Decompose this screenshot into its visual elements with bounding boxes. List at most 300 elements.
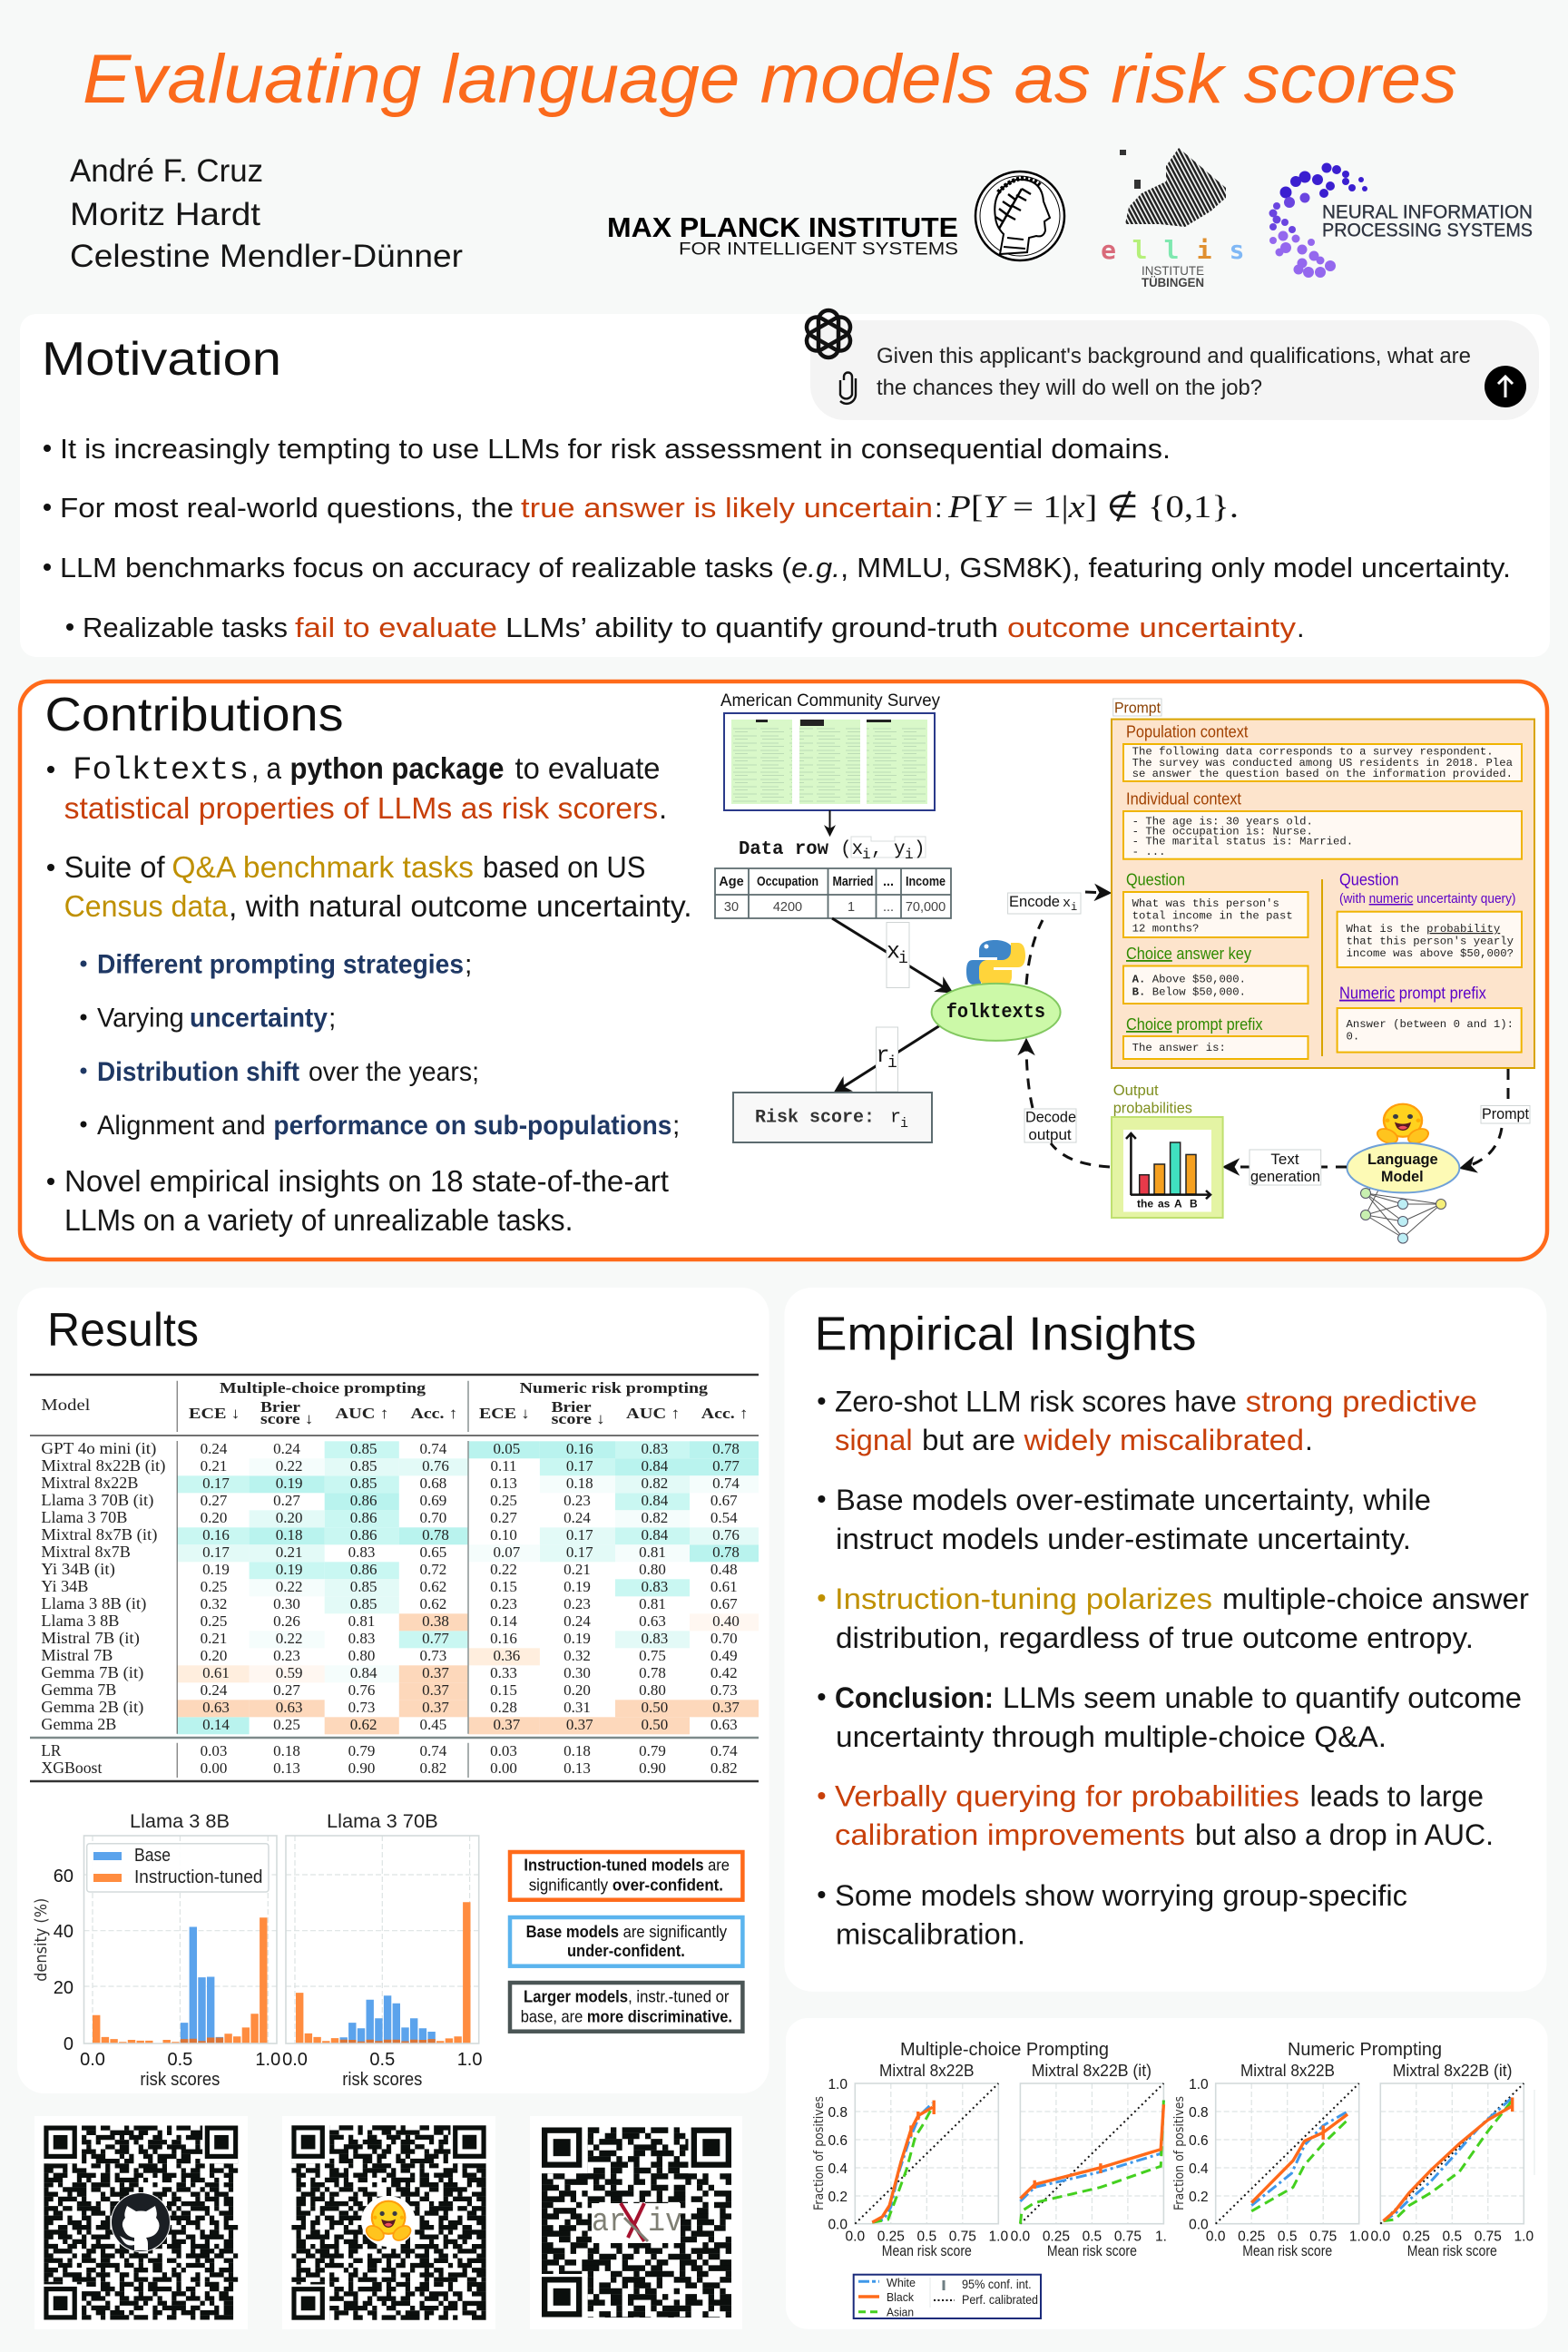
heading: empirical insights: Empirical Insights xyxy=(815,1308,1196,1361)
icon: python logo xyxy=(966,940,1025,987)
table rows: 0.81 xyxy=(639,1544,666,1561)
table rows: 0.19 xyxy=(564,1578,591,1595)
table header: AUC ↑ xyxy=(626,1405,681,1422)
chart: multiple-choice Mixtral 8x22B: 1.0 xyxy=(828,2077,848,2092)
risk score box xyxy=(733,1093,932,1142)
chart: numeric Mixtral 8x22B: 0.8 xyxy=(1189,2105,1209,2121)
data table xyxy=(715,868,951,918)
logo: ELLIS Institute Tübingen: l xyxy=(1164,235,1179,265)
table rows: Mixtral 8x22B (it) xyxy=(41,1456,166,1475)
table rows: 0.80 xyxy=(348,1647,375,1664)
chart: Llama 3 8B histogram: Llama 3 8B xyxy=(130,1811,230,1832)
table header: Acc. ↑ xyxy=(410,1405,457,1422)
chart: numeric Mixtral 8x22B: 0.0 xyxy=(1189,2218,1209,2232)
bullet: realizable tasks: Realizable tasks xyxy=(83,612,288,643)
table rows: 0.19 xyxy=(276,1475,302,1492)
prompt: individual context: - The age is: 30 years old. xyxy=(1132,815,1313,828)
insight: predictive signal: . xyxy=(1305,1424,1313,1456)
label: r_i xyxy=(877,1027,898,1092)
table rows: 0.11 xyxy=(490,1457,517,1475)
callout: more discriminative: base, are more discriminative. xyxy=(521,2008,732,2026)
data row label: i xyxy=(905,847,914,863)
table rows: 0.85 xyxy=(350,1440,377,1457)
table rows: 0.84 xyxy=(350,1664,377,1681)
prompt: question: 12 months? xyxy=(1132,923,1199,936)
table rows: 0.81 xyxy=(348,1612,375,1630)
table rows: 0.42 xyxy=(710,1664,738,1681)
table rows: XGBoost xyxy=(41,1759,103,1777)
chart: Llama 3 70B histogram: 0.0 xyxy=(282,2050,308,2070)
table rows: 0.90 xyxy=(639,1759,666,1777)
icon: arXiv logo: iv xyxy=(648,2203,682,2240)
bullet: Q&A benchmark: Q&A benchmark tasks xyxy=(172,850,474,884)
data row label: ) xyxy=(914,839,926,860)
label: decode output: Decode xyxy=(1025,1109,1076,1126)
label: text generation: Text xyxy=(1270,1151,1299,1168)
table rows: 0.62 xyxy=(350,1716,377,1733)
table rows: 0.59 xyxy=(276,1664,302,1681)
table rows: 0.26 xyxy=(273,1612,300,1630)
insight: conclusion xyxy=(818,1681,1522,1753)
chart: numeric Mixtral 8x22B (it): 0.0 xyxy=(1371,2229,1390,2244)
table rows: 0.00 xyxy=(201,1759,227,1777)
title: Evaluating language models as risk scores xyxy=(83,41,1457,118)
heading: contributions: Contributions xyxy=(45,689,343,741)
data table: 1 xyxy=(848,900,855,915)
chart: multiple-choice Mixtral 8x22B (it): 0.5 xyxy=(1083,2229,1102,2244)
data table: 4200 xyxy=(773,900,802,915)
table rows: 0.37 xyxy=(422,1681,449,1699)
table rows: Mixtral 8x22B xyxy=(41,1474,138,1492)
data table: 30 xyxy=(724,900,739,915)
prompt: question: Question xyxy=(1126,871,1185,889)
table rows: 0.67 xyxy=(710,1492,738,1509)
table rows: 0.54 xyxy=(710,1509,738,1526)
table rows: Llama 3 70B xyxy=(41,1508,127,1526)
table rows: 0.24 xyxy=(564,1612,591,1630)
chat prompt box xyxy=(810,320,1539,420)
table rows: 0.19 xyxy=(202,1561,230,1578)
data table: Age xyxy=(719,875,744,889)
table rows: 0.84 xyxy=(642,1526,669,1544)
chart: multiple-choice Mixtral 8x22B: 0.75 xyxy=(949,2229,976,2244)
chart: output probabilities: B xyxy=(1190,1198,1198,1210)
insight: group miscalibration: Some models show worrying group-specific xyxy=(835,1879,1407,1912)
table rows: 0.82 xyxy=(642,1509,668,1526)
chart: multiple-choice Mixtral 8x22B: 1.0 xyxy=(989,2229,1008,2244)
table rows: 0.63 xyxy=(202,1699,230,1716)
chart: multiple-choice Mixtral 8x22B: 0.0 xyxy=(828,2218,848,2232)
icon: hugging face xyxy=(1375,1104,1431,1146)
table rows: 0.86 xyxy=(350,1492,377,1509)
chart: numeric Mixtral 8x22B: Mixtral 8x22B xyxy=(1240,2062,1335,2080)
data row label: y xyxy=(894,839,906,860)
chart: numeric Mixtral 8x22B (it): Mixtral 8x22B (it) xyxy=(1393,2062,1512,2080)
prompt: choice answer key xyxy=(1123,945,1308,1004)
callout: over-confident xyxy=(510,1852,742,1900)
table rows: Yi 34B (it) xyxy=(41,1560,115,1578)
survey form thumbnail xyxy=(724,713,935,810)
heading: results: Results xyxy=(47,1304,199,1357)
arrow: encode head xyxy=(1085,892,1109,893)
table rows: 0.19 xyxy=(276,1561,302,1578)
bullet: true answer: For most real-world questions, the xyxy=(60,492,514,524)
table rows: 0.03 xyxy=(490,1742,517,1759)
callout: more discriminative: Larger models, instr.-tuned or xyxy=(524,1988,730,2006)
table rows: 0.86 xyxy=(350,1509,377,1526)
heading: numeric prompting: Numeric Prompting xyxy=(1288,2040,1442,2060)
chart: multiple-choice Mixtral 8x22B: 0.8 xyxy=(828,2105,848,2121)
table rows: 0.38 xyxy=(422,1612,449,1630)
table header: Model xyxy=(41,1396,91,1414)
chart: numeric Mixtral 8x22B: 1.0 xyxy=(1189,2077,1209,2092)
table rows: 0.17 xyxy=(566,1544,593,1561)
table rows: 0.81 xyxy=(639,1595,666,1612)
table rows: 0.22 xyxy=(276,1630,302,1647)
insight: verbal probabilities: calibration improvements xyxy=(835,1818,1185,1851)
table header: ECE ↓ xyxy=(479,1405,530,1422)
sub-bullet: prompting strategies: Different prompting strategies xyxy=(97,949,464,979)
bullet: empirical insights: LLMs on a variety of unrealizable tasks. xyxy=(64,1203,573,1237)
label: text generation: generation xyxy=(1250,1168,1320,1185)
table rows: 0.20 xyxy=(276,1509,302,1526)
label: prompt: Prompt xyxy=(1114,699,1161,717)
insight: instruction-tuning polarizes: Instruction-tuning polarizes xyxy=(835,1583,1212,1615)
chart: Llama 3 8B histogram xyxy=(32,1811,280,2090)
logo: ELLIS Institute Tübingen: INSTITUTE xyxy=(1142,263,1204,278)
sub-bullet: distribution shift: Distribution shift xyxy=(97,1057,299,1087)
chart: Llama 3 70B histogram: risk scores xyxy=(342,2070,422,2090)
sub-bullet: prompting strategies: ; xyxy=(465,949,472,979)
table rows: 0.72 xyxy=(420,1561,446,1578)
icon: ChatGPT logo xyxy=(803,310,854,358)
icon: GitHub logo xyxy=(111,2192,171,2252)
callout: under-confident xyxy=(510,1917,742,1966)
table rows: 0.25 xyxy=(201,1612,227,1630)
table rows: 0.16 xyxy=(202,1526,230,1544)
table rows: Mixtral 8x7B (it) xyxy=(41,1525,158,1544)
heading: multiple-choice prompting: Multiple-choice Prompting xyxy=(900,2040,1109,2060)
table header: ECE ↓ xyxy=(189,1405,240,1422)
icon: arXiv logo: ar xyxy=(592,2203,626,2240)
table rows: 0.24 xyxy=(201,1440,228,1457)
prompt: individual context xyxy=(1123,789,1522,859)
table rows: 0.70 xyxy=(420,1509,446,1526)
arrow: text generation xyxy=(1225,1165,1347,1169)
label: output probabilities xyxy=(1113,1082,1192,1116)
bullet: realizable tasks: LLMs’ ability to quantify ground-truth xyxy=(505,612,998,643)
arrow: prompt to language model xyxy=(1462,1128,1502,1168)
chart: output probabilities xyxy=(1112,1117,1223,1218)
table rows: 0.30 xyxy=(564,1664,591,1681)
chart legend: groups: 95% conf. int. xyxy=(962,2277,1032,2291)
table rows: 0.73 xyxy=(420,1647,446,1664)
data row label: (x xyxy=(840,839,863,860)
prompt: question xyxy=(1123,871,1308,937)
table rows: 0.32 xyxy=(201,1595,227,1612)
bullet: folktexts: statistical properties of LLMs as risk scorers xyxy=(64,791,658,825)
callout: under-confident: Base models are significantly xyxy=(526,1923,727,1941)
table rows: 0.84 xyxy=(642,1492,669,1509)
icon: arXiv logo xyxy=(592,2203,682,2243)
prompt: numeric prefix: Answer (between 0 and 1): xyxy=(1347,1018,1514,1031)
chart: numeric Mixtral 8x22B: 0.5 xyxy=(1278,2229,1297,2244)
table rows: 0.22 xyxy=(490,1561,517,1578)
bullet: benchmarks: LLM benchmarks focus on accuracy of realizable tasks ( e.g., MMLU, GSM8K), featuring only model uncertainty. xyxy=(60,552,1511,583)
table rows: 0.79 xyxy=(348,1742,375,1759)
prompt: individual context: Individual context xyxy=(1126,789,1241,808)
node: folktexts: folktexts xyxy=(946,1001,1045,1024)
panel: contributions xyxy=(20,681,1547,1259)
logo: ELLIS Institute Tübingen: e xyxy=(1101,235,1116,265)
heading: motivation: Motivation xyxy=(42,333,281,386)
arrow: folktexts to risk score xyxy=(836,1025,940,1092)
chart: numeric Mixtral 8x22B: 0.75 xyxy=(1309,2229,1337,2244)
logo: NeurIPS xyxy=(1269,163,1533,278)
bullet: realizable tasks: . xyxy=(1297,612,1305,643)
table rows: 0.21 xyxy=(276,1544,302,1561)
table rows: 0.78 xyxy=(712,1440,740,1457)
table rows: 0.77 xyxy=(712,1457,740,1475)
insight: conclusion: Conclusion: xyxy=(835,1681,994,1714)
chart: multiple-choice Mixtral 8x22B (it) xyxy=(1011,2062,1167,2259)
table rows: 0.22 xyxy=(276,1578,302,1595)
QR code: Hugging Face xyxy=(282,2116,495,2329)
label: x_i: i xyxy=(898,950,908,968)
table rows: 0.79 xyxy=(639,1742,666,1759)
table rows: 0.13 xyxy=(273,1759,300,1777)
table rows: 0.37 xyxy=(422,1664,449,1681)
chart: output probabilities: the xyxy=(1137,1198,1153,1210)
authors: André F. Cruz xyxy=(70,153,263,189)
bullet: true answer: P[Y = 1| x] ∉ {0,1}. xyxy=(947,489,1239,524)
table rows: 0.00 xyxy=(490,1759,517,1777)
chart: Llama 3 70B histogram: 0.5 xyxy=(369,2050,395,2070)
risk score box: Risk score: xyxy=(755,1108,875,1129)
table header: Brier xyxy=(260,1398,301,1416)
table rows: 0.82 xyxy=(710,1759,738,1777)
table rows: Mistral 7B xyxy=(41,1646,113,1664)
prompt: individual context: - The marital status is: Married. xyxy=(1132,836,1353,848)
table rows: 0.22 xyxy=(276,1457,302,1475)
data row label: , xyxy=(871,839,883,860)
chart: Llama 3 8B histogram: density (%) xyxy=(32,1898,51,1982)
insight: instruction-tuning polarizes: distribution, regardless of true outcome entropy. xyxy=(836,1622,1474,1654)
table rows: 0.83 xyxy=(348,1630,375,1647)
authors: Celestine Mendler-Dünner xyxy=(70,239,463,274)
table rows: 0.27 xyxy=(201,1492,228,1509)
logo: NeurIPS: PROCESSING SYSTEMS xyxy=(1322,220,1533,241)
logo: ELLIS Institute Tübingen xyxy=(1101,145,1244,289)
table rows: 0.73 xyxy=(348,1699,375,1716)
chart: numeric Mixtral 8x22B: Mean risk score xyxy=(1242,2242,1332,2259)
table header: score ↓ xyxy=(552,1410,605,1427)
prompt: numeric question: What is the probability xyxy=(1347,923,1500,936)
bullet: folktexts: to evaluate xyxy=(515,751,661,785)
chart: numeric Mixtral 8x22B: Fraction of positives xyxy=(1172,2096,1187,2210)
prompt: numeric question xyxy=(1338,871,1522,967)
chart: Llama 3 8B histogram: 0.5 xyxy=(167,2050,192,2070)
prompt: individual context: - The occupation is: Nurse. xyxy=(1132,826,1313,838)
sub-bullet: sub-populations: Alignment and xyxy=(97,1111,266,1141)
table rows: Llama 3 8B xyxy=(41,1612,119,1630)
prompt: numeric prefix: Numeric prompt prefix xyxy=(1339,985,1486,1003)
authors xyxy=(70,153,463,274)
table rows xyxy=(41,1439,740,1777)
table rows: 0.50 xyxy=(642,1716,668,1733)
insight: predictive signal: widely miscalibrated xyxy=(1023,1424,1304,1456)
bullet: true answer: true answer is likely uncertain xyxy=(521,492,933,524)
table rows: Mistral 7B (it) xyxy=(41,1629,140,1647)
prompt: choice answer key: A. Above $50,000. xyxy=(1132,974,1246,986)
insight: conclusion: LLMs seem unable to quantify outcome xyxy=(1003,1681,1522,1714)
table rows: 0.15 xyxy=(490,1681,517,1699)
table rows: 0.84 xyxy=(642,1457,669,1475)
prompt: question: What was this person's xyxy=(1132,897,1279,910)
heading: American Community Survey: American Community Survey xyxy=(720,691,940,710)
table rows: 0.18 xyxy=(273,1742,300,1759)
heatmap cells xyxy=(177,1441,759,1734)
label: decode output: output xyxy=(1028,1126,1072,1143)
data table: ... xyxy=(883,875,894,889)
insight: predictive signal xyxy=(818,1385,1477,1456)
table rows: 0.17 xyxy=(202,1544,230,1561)
label: text generation xyxy=(1250,1150,1321,1185)
sub-bullet: uncertainty: uncertainty xyxy=(190,1004,328,1034)
chart: Llama 3 8B histogram: 40 xyxy=(54,1922,74,1942)
table header: Acc. ↑ xyxy=(701,1405,749,1422)
bullet: true answer xyxy=(44,489,1239,524)
table rows: 0.17 xyxy=(202,1475,230,1492)
table rows: 0.17 xyxy=(566,1526,593,1544)
panel: prompt xyxy=(1112,699,1534,1068)
table rows: 0.80 xyxy=(639,1561,666,1578)
data table: Married xyxy=(833,875,873,889)
table rows: 0.30 xyxy=(273,1595,300,1612)
table rows: 0.90 xyxy=(348,1759,375,1777)
chart: Llama 3 8B histogram: 20 xyxy=(54,1978,74,1998)
insight: base vs instruct: instruct models under-estimate uncertainty. xyxy=(836,1523,1411,1555)
label: output probabilities: probabilities xyxy=(1113,1100,1192,1116)
prompt: population context: The following data corresponds to a survey respondent. xyxy=(1132,746,1494,759)
table rows: 0.28 xyxy=(490,1699,517,1716)
sub-bullet: sub-populations xyxy=(80,1111,680,1141)
table rows: 0.16 xyxy=(566,1440,593,1457)
table header: AUC ↑ xyxy=(335,1405,389,1422)
bullet: realizable tasks: outcome uncertainty xyxy=(1007,612,1297,643)
prompt: numeric question: Question xyxy=(1339,871,1399,889)
table rows: GPT 4o mini (it) xyxy=(41,1439,157,1457)
insight: group miscalibration xyxy=(818,1879,1407,1951)
label: x_i: x xyxy=(887,939,900,965)
table header: Numeric risk prompting xyxy=(520,1379,709,1396)
callout: under-confident: under-confident. xyxy=(567,1942,685,1960)
table rows: 0.83 xyxy=(348,1544,375,1561)
bullet: realizable tasks xyxy=(66,612,1305,643)
bullet: Q&A benchmark: Suite of xyxy=(64,850,165,884)
table rows: 0.10 xyxy=(490,1526,517,1544)
table rows: Gemma 2B (it) xyxy=(41,1698,144,1716)
chart: numeric Mixtral 8x22B (it): Mean risk score xyxy=(1407,2242,1497,2259)
table header: Brier xyxy=(552,1398,592,1416)
chart: multiple-choice Mixtral 8x22B (it): 1. xyxy=(1155,2229,1167,2244)
QR code: GitHub xyxy=(34,2116,248,2329)
chart: Llama 3 70B histogram xyxy=(282,1811,483,2090)
table rows: 0.05 xyxy=(494,1440,520,1457)
bullet: Q&A benchmark xyxy=(47,850,692,923)
insight: group miscalibration: miscalibration. xyxy=(836,1918,1025,1951)
table rows: 0.03 xyxy=(201,1742,227,1759)
table rows: 0.14 xyxy=(490,1612,517,1630)
table rows: 0.24 xyxy=(564,1509,591,1526)
chart legend: groups xyxy=(854,2275,1041,2319)
table rows: 0.63 xyxy=(276,1699,302,1716)
table rows: 0.23 xyxy=(490,1595,517,1612)
diagram: folktexts pipeline xyxy=(715,691,1534,1243)
table rows: 0.76 xyxy=(712,1526,740,1544)
chart: multiple-choice Mixtral 8x22B (it): Mixtral 8x22B (it) xyxy=(1032,2062,1152,2080)
table rows: 0.24 xyxy=(273,1440,300,1457)
chart: multiple-choice Mixtral 8x22B: 0.0 xyxy=(846,2229,865,2244)
chart: numeric Mixtral 8x22B: 0.4 xyxy=(1189,2161,1209,2177)
icon: hugging face xyxy=(361,2196,416,2247)
table rows: 0.86 xyxy=(350,1561,377,1578)
table rows: 0.37 xyxy=(494,1716,521,1733)
table rows: Gemma 7B xyxy=(41,1681,116,1699)
table rows: 0.33 xyxy=(490,1664,517,1681)
chart: numeric Mixtral 8x22B: 0.0 xyxy=(1206,2229,1226,2244)
label: encode x_i: x xyxy=(1063,896,1071,911)
table rows: 0.74 xyxy=(712,1475,740,1492)
logo: NeurIPS: NEURAL INFORMATION xyxy=(1322,201,1533,223)
chart: numeric Mixtral 8x22B (it): 0.75 xyxy=(1475,2229,1502,2244)
icon: neural network xyxy=(1361,1171,1446,1243)
table rows: 0.78 xyxy=(639,1664,666,1681)
logo: ELLIS Institute Tübingen: TÜBINGEN xyxy=(1142,275,1204,289)
table rows: 0.07 xyxy=(494,1544,521,1561)
table rows: 0.65 xyxy=(420,1544,446,1561)
insight: base vs instruct: Base models over-estimate uncertainty, while xyxy=(836,1484,1431,1516)
chart: output probabilities: A xyxy=(1174,1198,1182,1210)
prompt: population context: se answer the question based on the information provided. xyxy=(1132,768,1513,780)
bullet: Q&A benchmark: Census data xyxy=(64,889,229,923)
chart: multiple-choice Mixtral 8x22B (it): 0.0 xyxy=(1011,2229,1031,2244)
table rows: 0.69 xyxy=(420,1492,446,1509)
bullet: folktexts: python package xyxy=(290,751,505,785)
prompt: choice prefix xyxy=(1123,1015,1308,1059)
table rows: Llama 3 8B (it) xyxy=(41,1594,147,1612)
table rows: 0.32 xyxy=(564,1647,591,1664)
table rows: 0.45 xyxy=(420,1716,446,1733)
prompt: choice answer key: B. Below $50,000. xyxy=(1132,985,1246,998)
chart legend: groups: Asian xyxy=(887,2305,914,2319)
data row label xyxy=(739,837,926,863)
table rows: 0.86 xyxy=(350,1526,377,1544)
chart: numeric Mixtral 8x22B (it) xyxy=(1371,2062,1534,2259)
table rows: 0.85 xyxy=(350,1475,377,1492)
insight: predictive signal: strong predictive xyxy=(1246,1385,1477,1417)
arrow: encode xyxy=(1026,920,1043,985)
table rows: 0.18 xyxy=(276,1526,302,1544)
chart: multiple-choice Mixtral 8x22B: Mean risk score xyxy=(882,2242,972,2259)
arrow: decode to folktexts xyxy=(1026,1041,1033,1108)
table rows: 0.83 xyxy=(642,1578,668,1595)
sub-bullet: sub-populations: ; xyxy=(672,1111,680,1141)
table rows: LR xyxy=(41,1741,62,1759)
table rows: 0.37 xyxy=(422,1699,449,1716)
table rows: 0.27 xyxy=(490,1509,517,1526)
bullet: empirical insights: Novel empirical insights on 18 state-of-the-art xyxy=(64,1164,669,1198)
